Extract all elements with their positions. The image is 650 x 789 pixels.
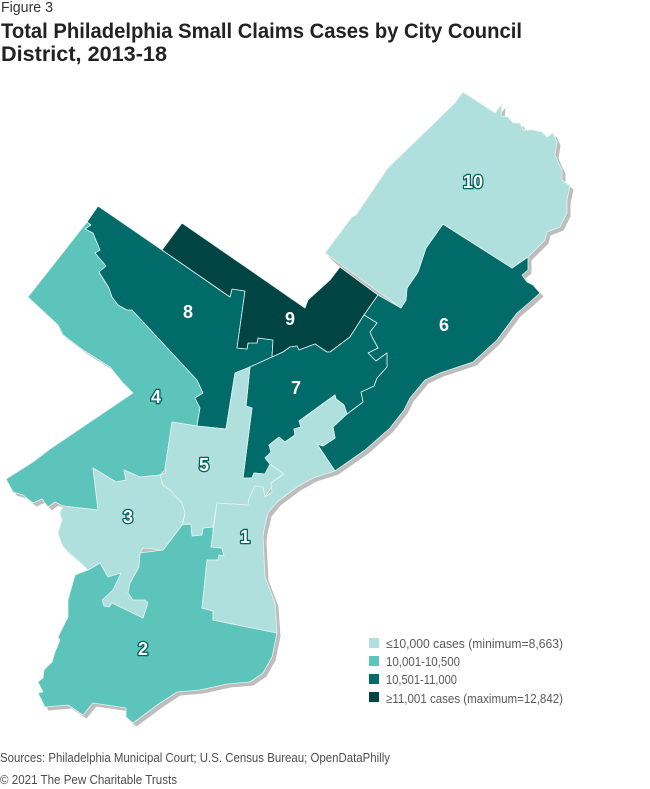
- district number labels: 5: [199, 455, 209, 475]
- district 6: [317, 224, 540, 471]
- title: [1, 19, 522, 66]
- district 10: [325, 92, 570, 308]
- copyright: © 2021 The Pew Charitable Trusts: [0, 773, 177, 787]
- legend: ≤10,000 cases (minimum=8,663): [386, 636, 563, 651]
- district number labels: 6: [439, 315, 449, 335]
- district number labels: 2: [138, 639, 148, 659]
- legend: 10,501-11,000: [386, 672, 457, 687]
- district number labels: 1: [240, 527, 250, 547]
- district 7: [243, 315, 387, 478]
- district 5: [160, 367, 284, 536]
- legend: ≥11,001 cases (maximum=12,842): [386, 691, 563, 706]
- legend: [369, 636, 563, 706]
- district number labels: 10: [463, 172, 483, 192]
- title: Total Philadelphia Small Claims Cases by City Council: [1, 19, 522, 43]
- district 1: [202, 395, 347, 633]
- sources note: Sources: Philadelphia Municipal Court; U.S. Census Bureau; OpenDataPhilly: [0, 751, 391, 765]
- district number labels: 3: [123, 507, 133, 527]
- legend: 10,001-10,500: [386, 654, 460, 669]
- district number labels: 7: [291, 378, 301, 398]
- district 9: [162, 223, 378, 357]
- choropleth map of council districts: [6, 92, 570, 723]
- district 2: [38, 524, 277, 723]
- district number labels: [123, 172, 483, 659]
- district 3: [58, 468, 185, 618]
- district number labels: 4: [151, 387, 161, 407]
- district number labels: 9: [285, 309, 295, 329]
- district number labels: 8: [183, 302, 193, 322]
- district 4: [6, 222, 203, 510]
- district 8: [85, 206, 273, 429]
- figure label: Figure 3: [1, 0, 53, 16]
- title: District, 2013-18: [1, 42, 167, 66]
- map shadow: [10, 96, 574, 726]
